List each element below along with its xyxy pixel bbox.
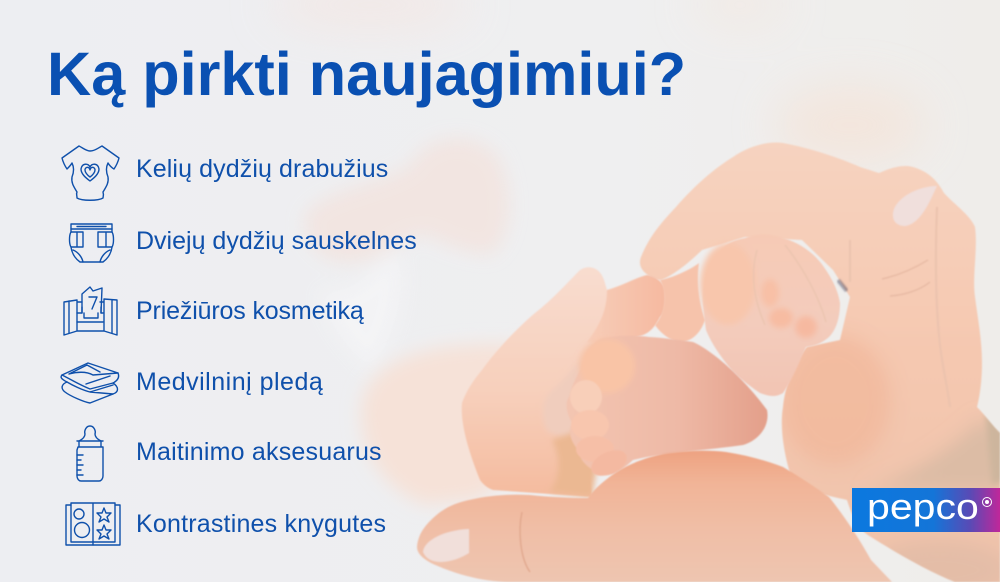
hanging finger [655, 263, 705, 342]
icon: diaper [68, 223, 114, 263]
list item: feeding accessories [76, 425, 382, 482]
hairy wrist [892, 421, 999, 488]
dark gap behind foot [838, 280, 847, 291]
list item: clothes: Kelių dydžių drabužius [136, 155, 388, 183]
warm palm crease [550, 432, 600, 497]
faded baby hand [304, 138, 509, 370]
icon: baby bodysuit [61, 145, 120, 201]
icon: registered mark [982, 497, 992, 507]
list item: blanket: Medvilninį pledą [136, 368, 323, 396]
icon: open contrast book [65, 502, 121, 546]
thumb edge [850, 208, 938, 330]
list item: contrast books [65, 502, 386, 546]
logo: pepco [852, 488, 1000, 532]
second finger [587, 275, 665, 343]
faint top shapes [270, 0, 925, 165]
background photo: baby feet held in parents' hands [308, 0, 1000, 582]
list item: cosmetics [63, 286, 364, 336]
icon: baby bottle [76, 425, 104, 482]
icon: wet wipes package [63, 286, 118, 336]
lower baby foot [567, 336, 768, 481]
bottom hand [417, 451, 892, 582]
thumb nail [423, 529, 469, 562]
list item: clothes [61, 145, 388, 201]
thumb creases [882, 260, 930, 296]
thumb nail [893, 186, 937, 226]
upper baby foot [700, 234, 840, 396]
left hand [462, 267, 665, 497]
list item: cosmetics: Priežiūros kosmetiką [136, 297, 364, 325]
title: Ką pirkti naujagimiui? [47, 40, 686, 108]
logo: pepco: pepco [867, 486, 979, 527]
right hand [639, 142, 1000, 582]
list item: diapers [68, 223, 417, 263]
list item: diapers: Dviejų dydžių sauskelnes [136, 227, 417, 255]
list item: feeding accessories: Maitinimo aksesuarus [136, 438, 382, 466]
inner palm shade [543, 343, 600, 440]
icon: folded blanket stack [60, 362, 120, 404]
list item: contrast books: Kontrastines knygutes [136, 510, 386, 538]
faded baby leg [361, 344, 570, 505]
palm warm shade [780, 335, 890, 465]
list item: blanket [60, 362, 323, 404]
